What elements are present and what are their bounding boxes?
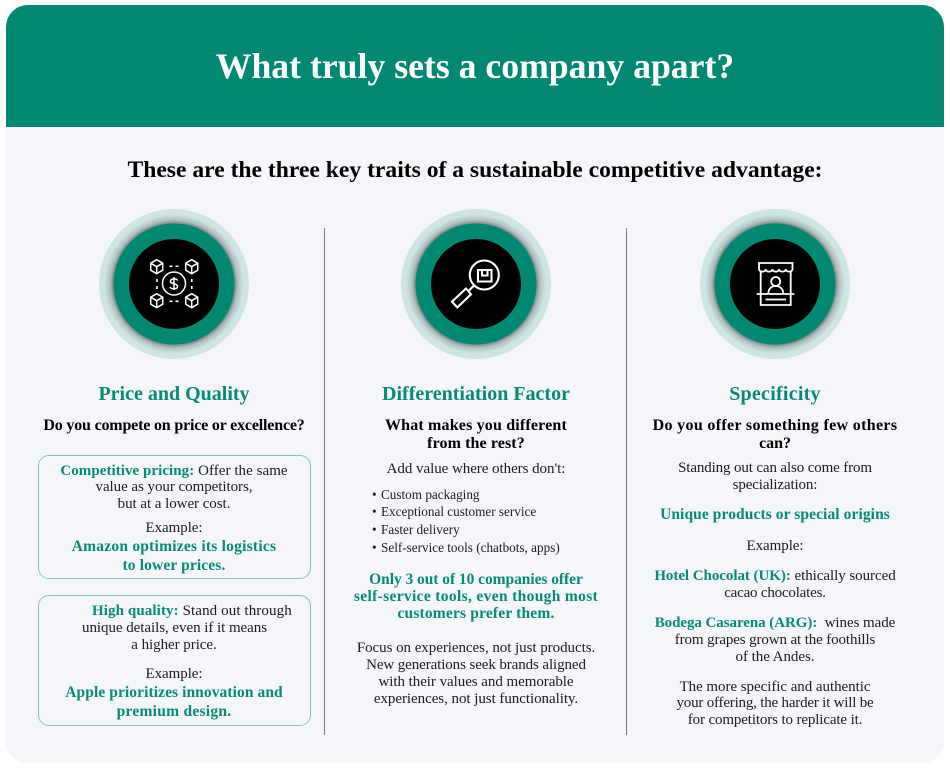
header band <box>6 5 944 127</box>
hotel chocolat example: Hotel Chocolat (UK): ethically sourced <box>654 568 896 584</box>
column 3 intro <box>678 460 872 493</box>
bodega casarena example: Bodega Casarena (ARG): wines made <box>655 615 895 631</box>
example label: Example: <box>145 666 203 682</box>
bullet list: Exceptional customer service <box>381 504 536 519</box>
amazon example line 2: to lower prices. <box>123 557 225 574</box>
column 3 heading: Specificity <box>729 383 821 405</box>
closing paragraph: New generations seek brands aligned <box>366 657 586 673</box>
competitive pricing line 2: value as your competitors, <box>96 479 252 495</box>
statistic callout: Only 3 out of 10 companies offer <box>369 571 583 588</box>
subtitle: These are the three key traits of a sustainable competitive advantage: <box>127 157 823 183</box>
statistic callout: customers prefer them. <box>397 605 555 622</box>
example label: Example: <box>145 520 203 536</box>
column 2 intro: Add value where others don't: <box>387 461 565 477</box>
column 1: price and quality <box>38 383 311 726</box>
amazon example: Amazon optimizes its logistics <box>72 538 276 555</box>
apple example line 2: premium design. <box>117 703 231 720</box>
closing paragraph: for competitors to replicate it. <box>688 712 862 728</box>
closing paragraph: your offering, the harder it will be <box>676 695 874 711</box>
example label: Example: <box>746 538 804 554</box>
icon: price and quality <box>99 209 249 359</box>
apple example: Apple prioritizes innovation and <box>65 684 283 701</box>
unique products highlight: Unique products or special origins <box>660 506 890 523</box>
column 2 question: What makes you different <box>385 417 567 434</box>
bodega casarena example <box>655 615 895 665</box>
high quality line 2: unique details, even if it means <box>82 620 267 636</box>
statistic callout <box>354 571 598 622</box>
closing paragraph: with their values and memorable <box>378 674 574 690</box>
column 1 question: Do you compete on price or excellence? <box>43 417 305 434</box>
column 3: specificity <box>652 383 897 728</box>
statistic callout: self-service tools, even though most <box>354 588 598 605</box>
competitive pricing text: Competitive pricing: Offer the same <box>60 463 288 479</box>
icon: differentiation factor <box>401 209 551 359</box>
column 2: differentiation factor <box>354 383 598 707</box>
hotel chocolat example: cacao chocolates. <box>724 585 826 601</box>
closing paragraph: Focus on experiences, not just products. <box>357 640 595 656</box>
column 2 heading: Differentiation Factor <box>382 383 570 405</box>
bullet list <box>372 487 560 555</box>
column 2 question line 2: from the rest? <box>427 435 525 452</box>
icon: specificity <box>700 209 850 359</box>
column 3 intro: specialization: <box>733 477 817 493</box>
box: competitive pricing <box>38 455 311 579</box>
box: high quality <box>38 595 311 726</box>
bullet list: Faster delivery <box>381 522 460 537</box>
column 3 question: Do you offer something few others <box>653 417 897 434</box>
hotel chocolat example <box>654 568 896 601</box>
bullet list: Self-service tools (chatbots, apps) <box>381 540 560 555</box>
closing paragraph <box>357 640 595 707</box>
bullet list: Custom packaging <box>381 487 480 502</box>
competitive pricing line 3: but at a lower cost. <box>118 496 230 512</box>
bodega casarena example: of the Andes. <box>736 649 814 665</box>
closing paragraph <box>676 679 874 728</box>
high quality line 3: a higher price. <box>131 637 217 653</box>
closing paragraph: experiences, not just functionality. <box>374 691 578 707</box>
column 1 heading: Price and Quality <box>98 383 250 405</box>
title: What truly sets a company apart? <box>216 46 734 86</box>
column 3 question line 2: can? <box>759 435 791 452</box>
column 3 intro: Standing out can also come from <box>678 460 872 476</box>
high quality text: High quality: Stand out through <box>92 603 292 619</box>
bodega casarena example: from grapes grown at the foothills <box>675 632 875 648</box>
closing paragraph: The more specific and authentic <box>680 679 870 695</box>
